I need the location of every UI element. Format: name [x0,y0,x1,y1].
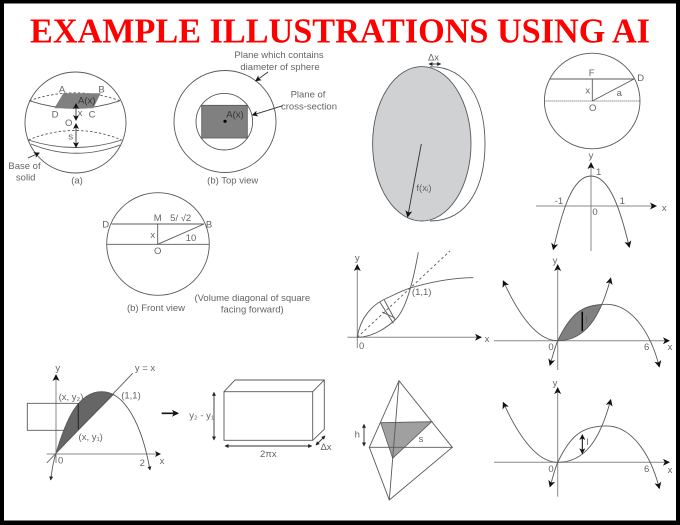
diagram: cylindrical shell as box: 2πx [260,449,277,460]
chart: downward parabola [536,150,667,251]
chart: region between parabola and y = x [27,363,165,480]
chart: region between parabola and y = x: (1,1) [121,390,141,402]
diagram: sphere top view: diameter of sphere [240,62,320,73]
chart: shaded region between parabolas [494,256,673,370]
diagram: circle with chord F-D: a [617,88,623,99]
chart: shaded region between parabolas: y [553,256,558,266]
diagram: sphere with cross-section (a): s [68,132,73,142]
chart: downward parabola: 1 [620,196,625,207]
diagram: sphere front view [102,193,310,316]
chart: region between parabola and y = x: 0 [58,456,63,466]
chart: downward parabola: 1 [596,167,601,178]
chart: region between parabola and y = x: 2 [140,458,145,469]
diagram: sphere front view: B [206,220,212,230]
diagram: sphere with cross-section (a): C [89,110,96,120]
diagram: circle with chord F-D: O [589,103,596,114]
diagram: circle with chord F-D: x [585,86,590,96]
chart: downward parabola: y [589,150,594,162]
chart: parabolas with double arrow: x [668,465,673,476]
diagram: cylindrical shell as box: Δx [320,442,332,453]
diagram: sphere top view: cross-section [281,102,337,112]
diagram: cylindrical shell as box [189,380,332,460]
chart: shaded region between parabolas: 6 [644,342,649,353]
chart: curves meeting at (1,1) with strip: x [485,334,490,345]
chart: region between parabola and y = x: x [160,456,165,467]
diagram: sphere with cross-section (a): D [52,110,59,120]
diagram: sphere top view: Plane which contains [234,50,324,61]
diagram: disk slice with thickness: Δx [428,52,439,64]
diagram: sphere front view: D [102,220,109,230]
diagram: sphere front view: facing forward) [221,304,284,316]
chart: region between parabola and y = x: y = x [135,363,155,374]
diagram: cylindrical shell as box: y₂ - y₁ [189,410,214,422]
chart: region between parabola and y = x: y [55,363,60,374]
title: EXAMPLE ILLUSTRATIONS USING AI [30,13,650,51]
diagram: circle with chord F-D: D [637,73,644,84]
diagram: sphere with cross-section (a): Base of [8,161,41,172]
diagram: sphere top view: (b) Top view [207,176,258,186]
diagram: sphere front view: 10 [186,233,196,244]
diagram: sphere front view: M [154,213,162,224]
chart: parabolas with double arrow: y [553,378,558,389]
diagram: pyramid with shaded cross-section [355,381,452,500]
chart: parabolas with double arrow [494,378,673,497]
chart: curves meeting at (1,1) with strip: (1,1) [412,287,431,298]
chart: curves meeting at (1,1) with strip [347,251,490,352]
diagram: sphere front view: x [150,230,155,241]
diagram: pyramid with shaded cross-section: s [419,434,424,445]
diagram: sphere with cross-section (a) [8,72,126,186]
diagram: disk slice with thickness: f(xᵢ) [416,183,432,194]
diagram: circle with chord F-D: F [589,68,595,79]
diagram: pyramid with shaded cross-section: h [355,430,360,440]
chart: region between parabola and y = x: (x, y₁) [79,432,103,443]
chart: downward parabola: -1 [555,196,563,207]
chart: shaded region between parabolas: x [668,342,673,353]
diagram: sphere front view: (b) Front view [127,303,185,314]
diagram: sphere front view: 5/ √2 [170,213,191,224]
arrow: to box [162,412,178,414]
diagram: sphere with cross-section (a): A [59,84,66,96]
chart: region between parabola and y = x: (x, y₂) [59,392,83,403]
diagram: sphere with cross-section (a): B [98,84,105,96]
chart: downward parabola: x [662,203,667,214]
chart: parabolas with double arrow: 6 [644,464,649,475]
chart: curves meeting at (1,1) with strip: y [355,253,360,264]
chart: parabolas with double arrow: l [586,437,589,448]
diagram: sphere with cross-section (a): (a) [71,176,83,186]
diagram: sphere top view [174,50,337,186]
diagram: sphere with cross-section (a): solid [16,172,35,184]
chart: downward parabola: 0 [592,207,598,218]
diagram: sphere with cross-section (a): A(x) [78,96,95,106]
diagram: sphere front view: (Volume diagonal of square [194,293,310,304]
chart: curves meeting at (1,1) with strip: 0 [359,341,364,352]
diagram: disk slice with thickness [373,52,485,221]
chart: shaded region between parabolas: l [586,314,588,326]
diagram: sphere with cross-section (a): O [65,118,72,129]
diagram: sphere front view: O [154,246,161,257]
diagram: sphere with cross-section (a): x [78,108,83,119]
chart: parabolas with double arrow: 0 [548,464,554,475]
chart: shaded region between parabolas: 0 [548,342,554,353]
diagram: sphere top view: Plane of [291,90,326,100]
diagram: sphere top view: A(x) [226,110,244,120]
diagram: circle with chord F-D [544,53,644,149]
